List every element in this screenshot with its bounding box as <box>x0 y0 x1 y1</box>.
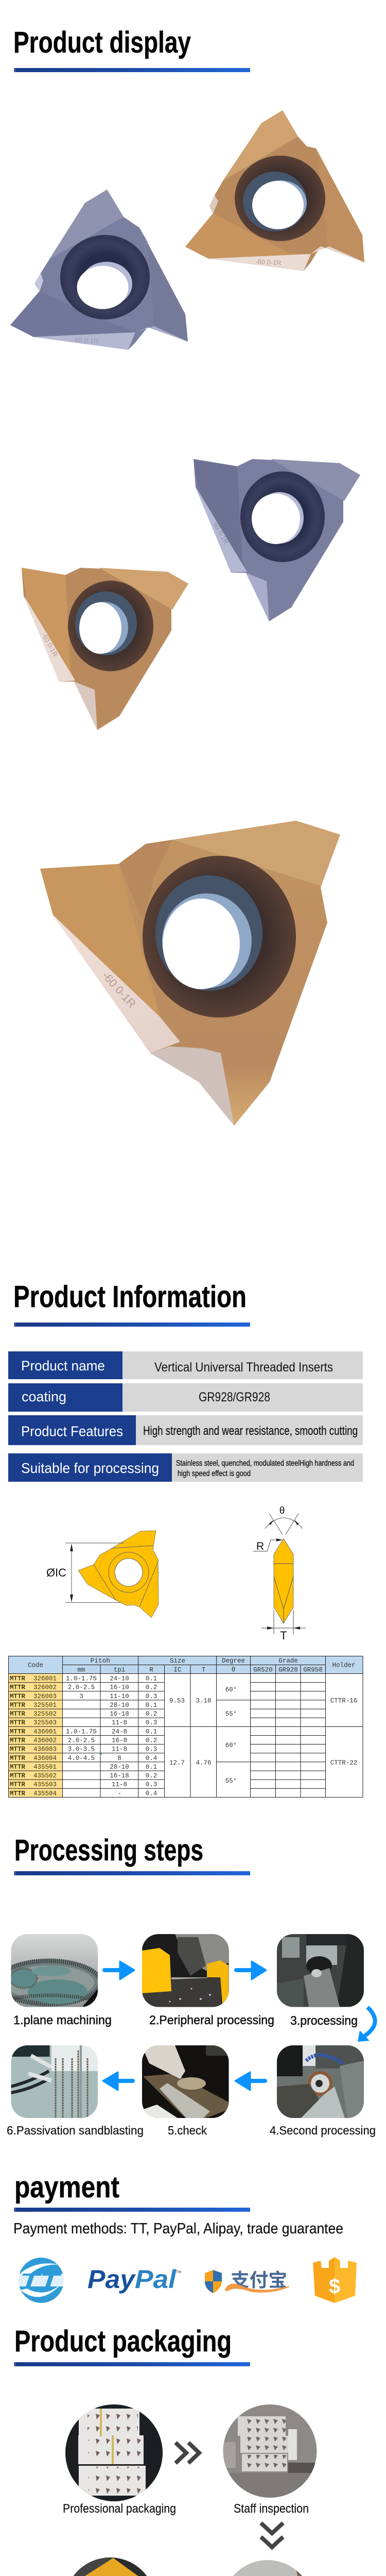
icon: PayPal logo: Pay <box>87 2265 136 2294</box>
icon: trade assurance shield <box>313 2257 357 2303</box>
table: insert codes and sizes: 0.2 <box>146 1772 157 1780</box>
table: insert codes and sizes: 0.4 <box>146 1755 157 1762</box>
diagram: insert top view with IC dimension: ØIC <box>46 1566 66 1579</box>
table: insert codes and sizes: 16-10 <box>110 1684 129 1691</box>
image: blue insert upper left: 60 0·1R <box>75 336 99 345</box>
table: insert codes and sizes: 16-18 <box>110 1710 129 1718</box>
table: insert codes and sizes: 435504 <box>33 1790 57 1797</box>
table: insert codes and sizes: 436002 <box>33 1737 57 1744</box>
table: insert codes and sizes: 435503 <box>33 1781 57 1788</box>
table: insert codes and sizes: 16-18 <box>110 1772 129 1780</box>
table: insert codes and sizes: 8 <box>117 1755 121 1762</box>
photo: staff inspection <box>221 2403 319 2501</box>
table: insert codes and sizes: 4.76 <box>196 1759 212 1767</box>
table: insert codes and sizes: 11-8 <box>112 1746 127 1753</box>
diagram: insert side view with R, T and theta: θ <box>279 1505 285 1516</box>
row: product name <box>8 1351 363 1379</box>
table: insert codes and sizes: 0.1 <box>146 1764 157 1771</box>
icon: PayPal logo: TM <box>176 2270 181 2274</box>
table: insert codes and sizes: mm <box>77 1666 85 1673</box>
label: 3.processing: 3.processing <box>290 2014 358 2028</box>
icon: Alipay logo: 支付宝 <box>231 2265 287 2292</box>
image: gold insert upper right <box>185 110 364 271</box>
photo: second processing <box>277 2045 364 2118</box>
diagram: insert side view with R, T and theta: R <box>256 1540 264 1552</box>
table: insert codes and sizes: 12.7 <box>169 1759 185 1767</box>
label: Staff inspection: Staff inspection <box>234 2502 309 2516</box>
table: insert codes and sizes: T <box>202 1666 206 1673</box>
arrow: step 4 to 5 <box>235 2072 267 2090</box>
photo: peripheral processing <box>142 1934 229 2007</box>
icon: Alipay logo <box>205 2265 289 2293</box>
image: large gold insert <box>40 821 340 1126</box>
table: insert codes and sizes: 325503 <box>33 1719 57 1726</box>
table: insert codes and sizes: 0.1 <box>146 1702 157 1709</box>
table: insert codes and sizes: 325501 <box>33 1702 57 1709</box>
table: insert codes and sizes: 0.1 <box>146 1728 157 1735</box>
table: insert codes and sizes: Code <box>28 1662 43 1669</box>
table: insert codes and sizes: MTTR <box>10 1702 26 1709</box>
table: insert codes and sizes: 3.0-3.5 <box>68 1746 95 1753</box>
row: product name: Product name <box>21 1358 105 1374</box>
heading: Product Information: Product Information <box>13 1280 247 1314</box>
table: insert codes and sizes: 326003 <box>33 1693 57 1700</box>
table: insert codes and sizes: 0.3 <box>146 1781 157 1788</box>
table: insert codes and sizes: 326001 <box>33 1675 57 1683</box>
photo: professional packaging <box>65 2404 163 2501</box>
table: insert codes and sizes: 24-8 <box>112 1728 127 1735</box>
table: insert codes and sizes: 60° <box>225 1742 237 1749</box>
table: insert codes and sizes: - <box>117 1790 121 1797</box>
image: blue insert right <box>194 459 360 621</box>
table: insert codes and sizes: 3.18 <box>196 1697 212 1704</box>
photo: plane machining <box>11 1934 98 2007</box>
heading: payment <box>14 2171 250 2212</box>
table: insert codes and sizes: Holder <box>332 1662 356 1669</box>
table: insert codes and sizes: 11-8 <box>112 1719 127 1726</box>
table: insert codes and sizes: MTTR <box>10 1781 26 1788</box>
table: insert codes and sizes: MTTR <box>10 1746 26 1753</box>
table: insert codes and sizes <box>8 1656 363 1797</box>
table: insert codes and sizes: Degree <box>222 1657 245 1665</box>
heading: Product display: Product display <box>13 26 191 59</box>
table: insert codes and sizes: 0.3 <box>146 1746 157 1753</box>
table: insert codes and sizes: 11-8 <box>112 1781 127 1788</box>
panel: processing steps flow <box>0 1934 376 2137</box>
photo: cargo for transportation <box>73 2557 147 2576</box>
label: 4.Second processing: 4.Second processing <box>270 2124 376 2137</box>
table: insert codes and sizes: 2.0-2.5 <box>68 1684 95 1691</box>
panel: packaging flow <box>51 2401 319 2576</box>
table: insert codes and sizes: R <box>149 1666 153 1673</box>
table: insert codes and sizes: MTTR <box>10 1737 26 1744</box>
table: insert codes and sizes: GR958 <box>303 1666 323 1673</box>
arrow: step 2 to 3 <box>234 1961 266 1979</box>
table: insert codes and sizes: Pitoh <box>91 1657 110 1665</box>
table: insert codes and sizes: MTTR <box>10 1710 26 1718</box>
label: 5.check: 5.check <box>168 2124 207 2137</box>
image: blue insert right: 60 0·1R <box>212 521 231 546</box>
table: insert codes and sizes: MTTR <box>10 1719 26 1726</box>
table: insert codes and sizes: 9.53 <box>169 1697 185 1704</box>
row: coating: coating <box>22 1389 66 1404</box>
icon: TT logo <box>19 2258 64 2303</box>
table: insert codes and sizes: 0.2 <box>146 1710 157 1718</box>
table: insert codes and sizes: GR520 <box>253 1666 273 1673</box>
table: insert codes and sizes: 326002 <box>33 1684 57 1691</box>
table: insert codes and sizes: 28-10 <box>110 1702 129 1709</box>
row: coating <box>8 1383 363 1412</box>
table: insert codes and sizes: 0.1 <box>146 1675 157 1683</box>
table: insert codes and sizes: Size <box>170 1657 185 1665</box>
table: insert codes and sizes: MTTR <box>10 1684 26 1691</box>
image: gold insert upper right: -60 0-1R <box>255 258 282 267</box>
table: insert codes and sizes: 325502 <box>33 1710 57 1718</box>
table: insert codes and sizes: MTTR <box>10 1728 26 1735</box>
table: insert codes and sizes: 0.4 <box>146 1790 157 1797</box>
table: insert codes and sizes: 55° <box>225 1710 237 1718</box>
table: insert codes and sizes: 436001 <box>33 1728 57 1735</box>
photo: processing <box>277 1934 364 2007</box>
table: insert codes and sizes: 435502 <box>33 1772 57 1780</box>
photo: check <box>142 2045 229 2118</box>
row: suitable for processing: Suitable for processing <box>21 1460 159 1476</box>
table: insert codes and sizes: 0.3 <box>146 1719 157 1726</box>
heading: Product display <box>13 26 250 72</box>
panel: product specification rows <box>8 1351 363 1482</box>
table: insert codes and sizes: 2.0-2.5 <box>68 1737 95 1744</box>
heading: payment: payment <box>14 2171 119 2204</box>
image: gold insert left <box>22 568 188 730</box>
table: insert codes and sizes: 11-10 <box>110 1693 129 1700</box>
arrow: step 5 to 6 <box>103 2072 135 2090</box>
table: insert codes and sizes: MTTR <box>10 1675 26 1683</box>
table: insert codes and sizes: IC <box>173 1666 182 1673</box>
photo: carton packaging <box>233 2560 302 2576</box>
diagram: insert side view with R, T and theta <box>253 1505 306 1642</box>
icon: trade assurance shield: $ <box>329 2275 340 2298</box>
table: insert codes and sizes: MTTR <box>10 1755 26 1762</box>
image: blue insert upper left <box>10 190 188 350</box>
table: insert codes and sizes: MTTR <box>10 1790 26 1797</box>
table: insert codes and sizes: 435501 <box>33 1764 57 1771</box>
table: insert codes and sizes: CTTR-16 <box>330 1697 357 1704</box>
table: insert codes and sizes: 60° <box>225 1686 237 1693</box>
heading: Processing steps: Processing steps <box>14 1834 203 1867</box>
table: insert codes and sizes: 4.0-4.5 <box>68 1755 95 1762</box>
table: insert codes and sizes: 28-10 <box>110 1764 129 1771</box>
arrow: chevrons down <box>261 2523 283 2547</box>
table: insert codes and sizes: 0.3 <box>146 1693 157 1700</box>
table: insert codes and sizes: MTTR <box>10 1772 26 1780</box>
table: insert codes and sizes: 55° <box>225 1777 237 1785</box>
row: suitable for processing <box>8 1453 363 1482</box>
label: Professional packaging: Professional packaging <box>63 2502 176 2516</box>
table: insert codes and sizes: MTTR <box>10 1693 26 1700</box>
table: insert codes and sizes: 436003 <box>33 1746 57 1753</box>
icon: PayPal logo <box>87 2265 181 2294</box>
table: insert codes and sizes: 3 <box>79 1693 83 1700</box>
heading: Product Information <box>13 1280 250 1327</box>
diagram: insert top view with IC dimension <box>46 1531 159 1618</box>
diagram: insert side view with R, T and theta: T <box>280 1629 287 1642</box>
photo: passivation sandblasting <box>11 2045 98 2118</box>
arrow: curved step 3 to 4 <box>358 2007 375 2042</box>
icon: PayPal logo: Pal <box>135 2265 177 2294</box>
heading: Product packaging: Product packaging <box>14 2325 232 2358</box>
table: insert codes and sizes: 0.2 <box>146 1737 157 1744</box>
row: product features: Product Features <box>21 1423 123 1439</box>
row: coating: GR928/GR928 <box>199 1390 270 1404</box>
table: insert codes and sizes: Grade <box>278 1657 298 1665</box>
label: 1.plane machining: 1.plane machining <box>13 2013 112 2027</box>
image: large gold insert: -60 0-1R <box>99 969 138 1010</box>
table: insert codes and sizes: 436004 <box>33 1755 57 1762</box>
row: suitable for processing: high speed effect is good <box>178 1469 251 1478</box>
image: gold insert left: -60 0-1R <box>40 631 59 658</box>
table: insert codes and sizes: MTTR <box>10 1764 26 1771</box>
label: 6.Passivation sandblasting: 6.Passivation sandblasting <box>7 2124 144 2137</box>
label: 2.Peripheral processing: 2.Peripheral processing <box>149 2013 274 2027</box>
table: insert codes and sizes: θ <box>232 1666 235 1673</box>
table: insert codes and sizes: 0.2 <box>146 1684 157 1691</box>
table: insert codes and sizes: 16-8 <box>112 1737 127 1744</box>
table: insert codes and sizes: GR928 <box>278 1666 298 1673</box>
table: insert codes and sizes: 24-10 <box>110 1675 129 1683</box>
row: product features <box>8 1415 363 1445</box>
table: insert codes and sizes: CTTR-22 <box>330 1759 357 1767</box>
arrow: step 1 to 2 <box>102 1961 134 1979</box>
icon: TT logo: TT <box>20 2269 62 2291</box>
arrow: chevrons right <box>176 2443 199 2463</box>
table: insert codes and sizes: 1.0-1.75 <box>66 1728 97 1735</box>
table: insert codes and sizes: 1.0-1.75 <box>66 1675 97 1683</box>
text: payment methods: Payment methods: TT, PayPal, Alipay, trade guarantee <box>13 2221 343 2237</box>
row: product name: Vertical Universal Threaded Inserts <box>154 1360 333 1375</box>
table: insert codes and sizes: tpi <box>114 1666 125 1673</box>
